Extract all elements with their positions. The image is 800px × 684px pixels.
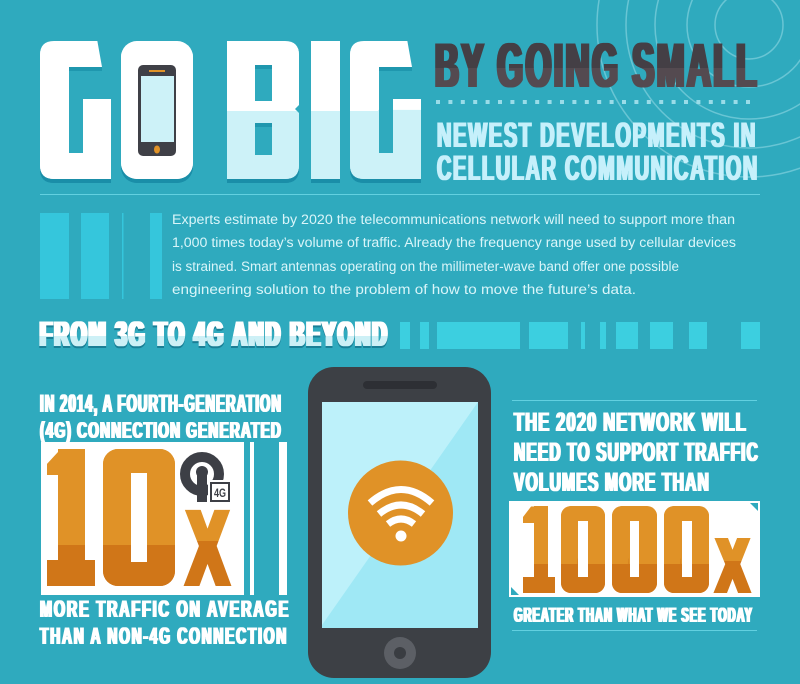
number: 1000x: [523, 506, 752, 593]
number: 10x: 0: [94, 407, 184, 642]
title: GO: O: [112, 0, 202, 235]
title: BIG: [227, 41, 421, 183]
title: GO: [40, 41, 193, 183]
text: more traffic: MORE TRAFFIC ON AVERAGE: [40, 596, 290, 623]
number: 1000x: 0: [655, 481, 717, 627]
title: BIG: B: [216, 0, 310, 235]
icon: signal rings: [597, 0, 800, 177]
panel: 1000x stat: [509, 501, 760, 597]
intro text: Experts estimate by 2020 the telecommunications network will need to support more than: [172, 212, 735, 227]
intro text: [172, 212, 736, 297]
number: 1000x: X: [716, 521, 749, 610]
dotted divider: [436, 100, 758, 104]
intro text: 1,000 times today’s volume of traffic. Already the frequency range used by cellular devices: [172, 235, 736, 250]
title: BIG: I: [305, 0, 345, 235]
text: more traffic: [40, 596, 290, 650]
title: BIG: G: [340, 0, 430, 235]
icon: wifi: [348, 460, 453, 566]
number: 10x: 1: [36, 407, 106, 642]
icon: 4G signal: [185, 457, 232, 504]
heading: from 3G to 4G and beyond: FROM 3G TO 4G AND BEYOND: [40, 315, 389, 354]
number: 1000x: 0: [552, 481, 614, 627]
large phone: [308, 367, 491, 678]
number: 10x: X: [186, 487, 229, 610]
decorative intro bars: [40, 213, 162, 299]
icon: small phone: [138, 65, 176, 156]
title: GO: G: [30, 0, 120, 235]
panel: 10x stat: [41, 442, 287, 595]
number: 10x: [47, 449, 232, 586]
number: 1000x: 0: [603, 481, 665, 627]
number: 1000x: 1: [515, 481, 561, 627]
subtitle: [437, 116, 759, 188]
decorative bar strip: [400, 322, 760, 349]
text: 2014 4G heading: IN 2014, A FOURTH-GENERATION: [40, 390, 282, 418]
intro text: engineering solution to the problem of how to move the future’s data.: [172, 282, 636, 297]
text: 2020 network heading: [514, 407, 759, 497]
icon: 4G signal: 4G: [214, 486, 226, 500]
intro text: is strained. Smart antennas operating on the millimeter-wave band offer one possible: [172, 259, 679, 274]
text: 2014 4G heading: [40, 390, 282, 443]
text: 2014 4G heading: (4G) CONNECTION GENERATED: [40, 417, 282, 443]
text: more traffic: THAN A NON-4G CONNECTION: [40, 623, 288, 650]
